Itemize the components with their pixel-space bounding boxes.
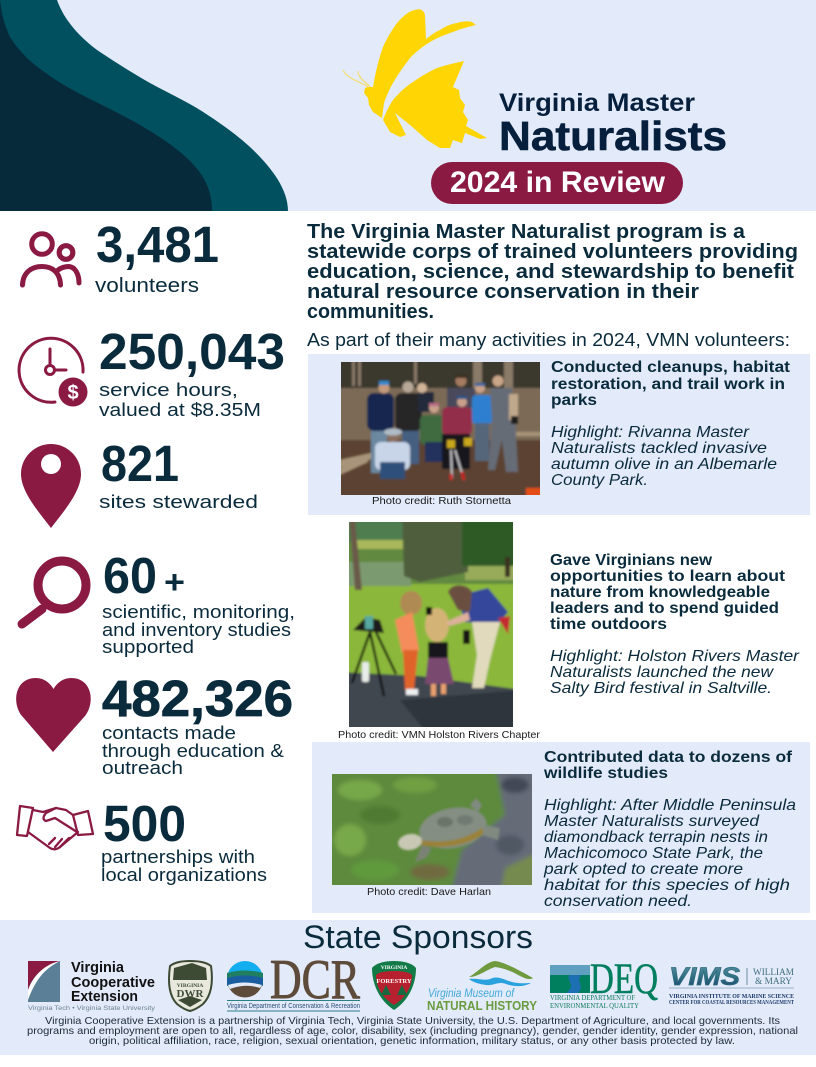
nondiscrimination statement: origin, political affiliation, race, religion, sexual orientation, genetic information, military status, or any other basis protected by law. xyxy=(89,1035,735,1047)
sponsors heading: State Sponsors xyxy=(303,919,533,955)
icon: clock with dollar xyxy=(19,338,88,406)
stat: contacts: contacts made xyxy=(102,722,236,743)
photo credit: Photo credit: Ruth Stornetta xyxy=(372,495,511,507)
icon: handshake xyxy=(17,806,93,849)
logo: DCR xyxy=(227,949,360,1011)
stat: contacts: outreach xyxy=(102,757,183,778)
logo: butterfly xyxy=(343,9,487,148)
cleanups text: Highlight: Rivanna Master xyxy=(551,424,750,441)
logo: Virginia Museum of Natural History: NATURAL HISTORY xyxy=(427,999,538,1013)
stat: partnerships: 500 xyxy=(103,795,186,852)
logo: DEQ: DEQ xyxy=(590,956,658,1003)
intro heading: The Virginia Master Naturalist program is a xyxy=(307,221,746,243)
icon: heart xyxy=(16,678,91,752)
icon: clock with dollar: $ xyxy=(67,382,79,404)
logo: Virginia Cooperative Extension: Cooperative xyxy=(71,974,155,991)
logo: VIMS William and Mary: & MARY xyxy=(755,977,792,987)
stat: studies xyxy=(22,547,295,657)
logo: Virginia Museum of Natural History xyxy=(427,961,538,1013)
wildlife text: Contributed data to dozens of xyxy=(544,749,793,766)
stat: studies: scientific, monitoring, xyxy=(102,601,295,622)
learning text: opportunities to learn about xyxy=(550,568,786,585)
icon: map pin xyxy=(21,444,81,528)
stat: sites stewarded: 821 xyxy=(101,435,179,492)
photo: volunteers group in forest xyxy=(341,362,540,495)
logo: Virginia Museum of Natural History: Virginia Museum of xyxy=(428,986,515,1000)
logo: Virginia Forestry: FORESTRY xyxy=(376,978,412,985)
logo wordmark: Naturalists xyxy=(499,113,727,159)
learning text: nature from knowledgeable xyxy=(550,584,770,601)
stat: contacts: through education & xyxy=(102,740,285,761)
photo credit: Photo credit: Dave Harlan xyxy=(367,886,491,898)
stat: partnerships: partnerships with xyxy=(101,846,255,867)
logo: VIMS William and Mary: VIRGINIA INSTITUTE OF MARINE SCIENCE xyxy=(669,993,794,1000)
intro heading: education, science, and stewardship to benefit xyxy=(307,261,794,283)
wildlife text: Machicomoco State Park, the xyxy=(544,845,763,862)
nondiscrimination statement: programs and employment are open to all, regardless of age, color, disability, sex (including pregnancy), gender, gender identity, gender expression, national xyxy=(27,1025,798,1037)
logo: VIMS William and Mary: VIMS xyxy=(669,963,740,991)
stat: service hours: 250,043 xyxy=(99,323,285,380)
logo: DCR: Virginia Department of Conservation & Recreation xyxy=(227,1003,360,1010)
intro heading xyxy=(307,221,798,323)
stat: service hours xyxy=(19,323,285,420)
2024 in review pill: 2024 in Review xyxy=(450,166,666,199)
learning text xyxy=(550,552,800,697)
cleanups text: County Park. xyxy=(551,472,648,489)
icon: people xyxy=(22,234,79,285)
learning text: leaders and to spend guided xyxy=(550,600,779,617)
learning text: Naturalists launched the new xyxy=(550,664,775,681)
learning text: Gave Virginians new xyxy=(550,552,713,569)
panel: state sponsors footer xyxy=(0,919,816,1055)
stat: studies: 60 xyxy=(103,547,157,604)
2024 in review pill xyxy=(431,162,683,204)
stat: sites stewarded: sites stewarded xyxy=(99,491,258,512)
cleanups text: Conducted cleanups, habitat xyxy=(551,359,791,376)
logo: Virginia DWR: VIRGINIA xyxy=(177,983,203,989)
stat: volunteers: 3,481 xyxy=(96,216,219,273)
stat: contacts: 482,326 xyxy=(102,670,293,727)
stat: sites stewarded xyxy=(21,435,258,528)
panel: learning outdoors xyxy=(338,512,800,741)
cleanups text xyxy=(551,359,791,489)
learning text: Salty Bird festival in Saltville. xyxy=(550,680,772,697)
wildlife text: park opted to create more xyxy=(543,861,743,878)
logo: VIMS William and Mary: WILLIAM xyxy=(753,968,795,978)
nondiscrimination statement xyxy=(27,1015,798,1047)
stat: studies: + xyxy=(164,564,185,600)
cleanups text: autumn olive in an Albemarle xyxy=(551,456,777,473)
intro heading: natural resource conservation in their xyxy=(307,281,699,303)
wildlife text: wildlife studies xyxy=(543,765,668,782)
logo: Virginia Forestry: VIRGINIA xyxy=(381,965,407,971)
nondiscrimination statement: Virginia Cooperative Extension is a partnership of Virginia Tech, Virginia State University, the U.S. Department of Agriculture, and local governments. Its xyxy=(45,1015,780,1027)
cleanups text: parks xyxy=(551,392,597,409)
wildlife text: conservation need. xyxy=(544,893,692,910)
wildlife text xyxy=(543,749,796,910)
stat: service hours: service hours, xyxy=(99,379,238,400)
intro heading: statewide corps of trained volunteers providing xyxy=(307,241,798,263)
stat: contacts xyxy=(16,670,293,778)
header banner xyxy=(0,0,816,211)
logo: DEQ: VIRGINIA DEPARTMENT OF xyxy=(550,994,635,1002)
logo: Virginia Cooperative Extension: Virginia xyxy=(71,959,125,976)
learning text: time outdoors xyxy=(550,616,667,633)
photo: diamondback terrapin xyxy=(332,774,532,885)
panel: cleanups xyxy=(308,352,810,515)
logo wordmark: Virginia Master xyxy=(499,89,695,117)
intro heading: communities. xyxy=(307,301,434,323)
logo: Virginia Forestry xyxy=(372,961,416,1010)
logo: Virginia Cooperative Extension: Extension xyxy=(71,988,138,1005)
icon: magnifying glass xyxy=(22,561,86,624)
stat: volunteers: volunteers xyxy=(95,275,199,297)
logo: Virginia Cooperative Extension xyxy=(28,959,156,1012)
logo: Virginia Cooperative Extension: Virginia Tech • Virginia State University xyxy=(28,1005,156,1012)
logo: DEQ xyxy=(550,956,658,1010)
teal wave xyxy=(0,0,288,211)
logo: Virginia DWR: DWR xyxy=(177,988,204,1000)
stat: partnerships: local organizations xyxy=(101,864,267,885)
cleanups text: restoration, and trail work in xyxy=(551,376,785,393)
stat: service hours: valued at $8.35M xyxy=(99,399,261,420)
logo: VIMS William and Mary xyxy=(669,963,795,1006)
photo credit: Photo credit: VMN Holston Rivers Chapter xyxy=(338,729,541,741)
wildlife text: Highlight: After Middle Peninsula xyxy=(544,797,796,814)
stat: volunteers xyxy=(22,216,219,297)
stat: partnerships xyxy=(17,795,267,885)
logo: DEQ: ENVIRONMENTAL QUALITY xyxy=(550,1002,639,1010)
logo: DCR: DCR xyxy=(270,949,360,1011)
cleanups text: Naturalists tackled invasive xyxy=(551,440,767,457)
panel: wildlife data xyxy=(312,742,810,913)
stat: studies: and inventory studies xyxy=(102,619,291,640)
wildlife text: diamondback terrapin nests in xyxy=(544,829,768,846)
wildlife text: Master Naturalists surveyed xyxy=(544,813,760,830)
logo: Virginia DWR xyxy=(169,961,212,1011)
stat: studies: supported xyxy=(102,636,194,657)
dark navy wave xyxy=(0,0,212,211)
logo wordmark xyxy=(499,89,727,159)
photo: children at spotting scope xyxy=(349,522,513,727)
wildlife text: habitat for this species of high xyxy=(544,877,790,894)
learning text: Highlight: Holston Rivers Master xyxy=(550,648,800,665)
intro sentence: As part of their many activities in 2024, VMN volunteers: xyxy=(307,330,790,350)
